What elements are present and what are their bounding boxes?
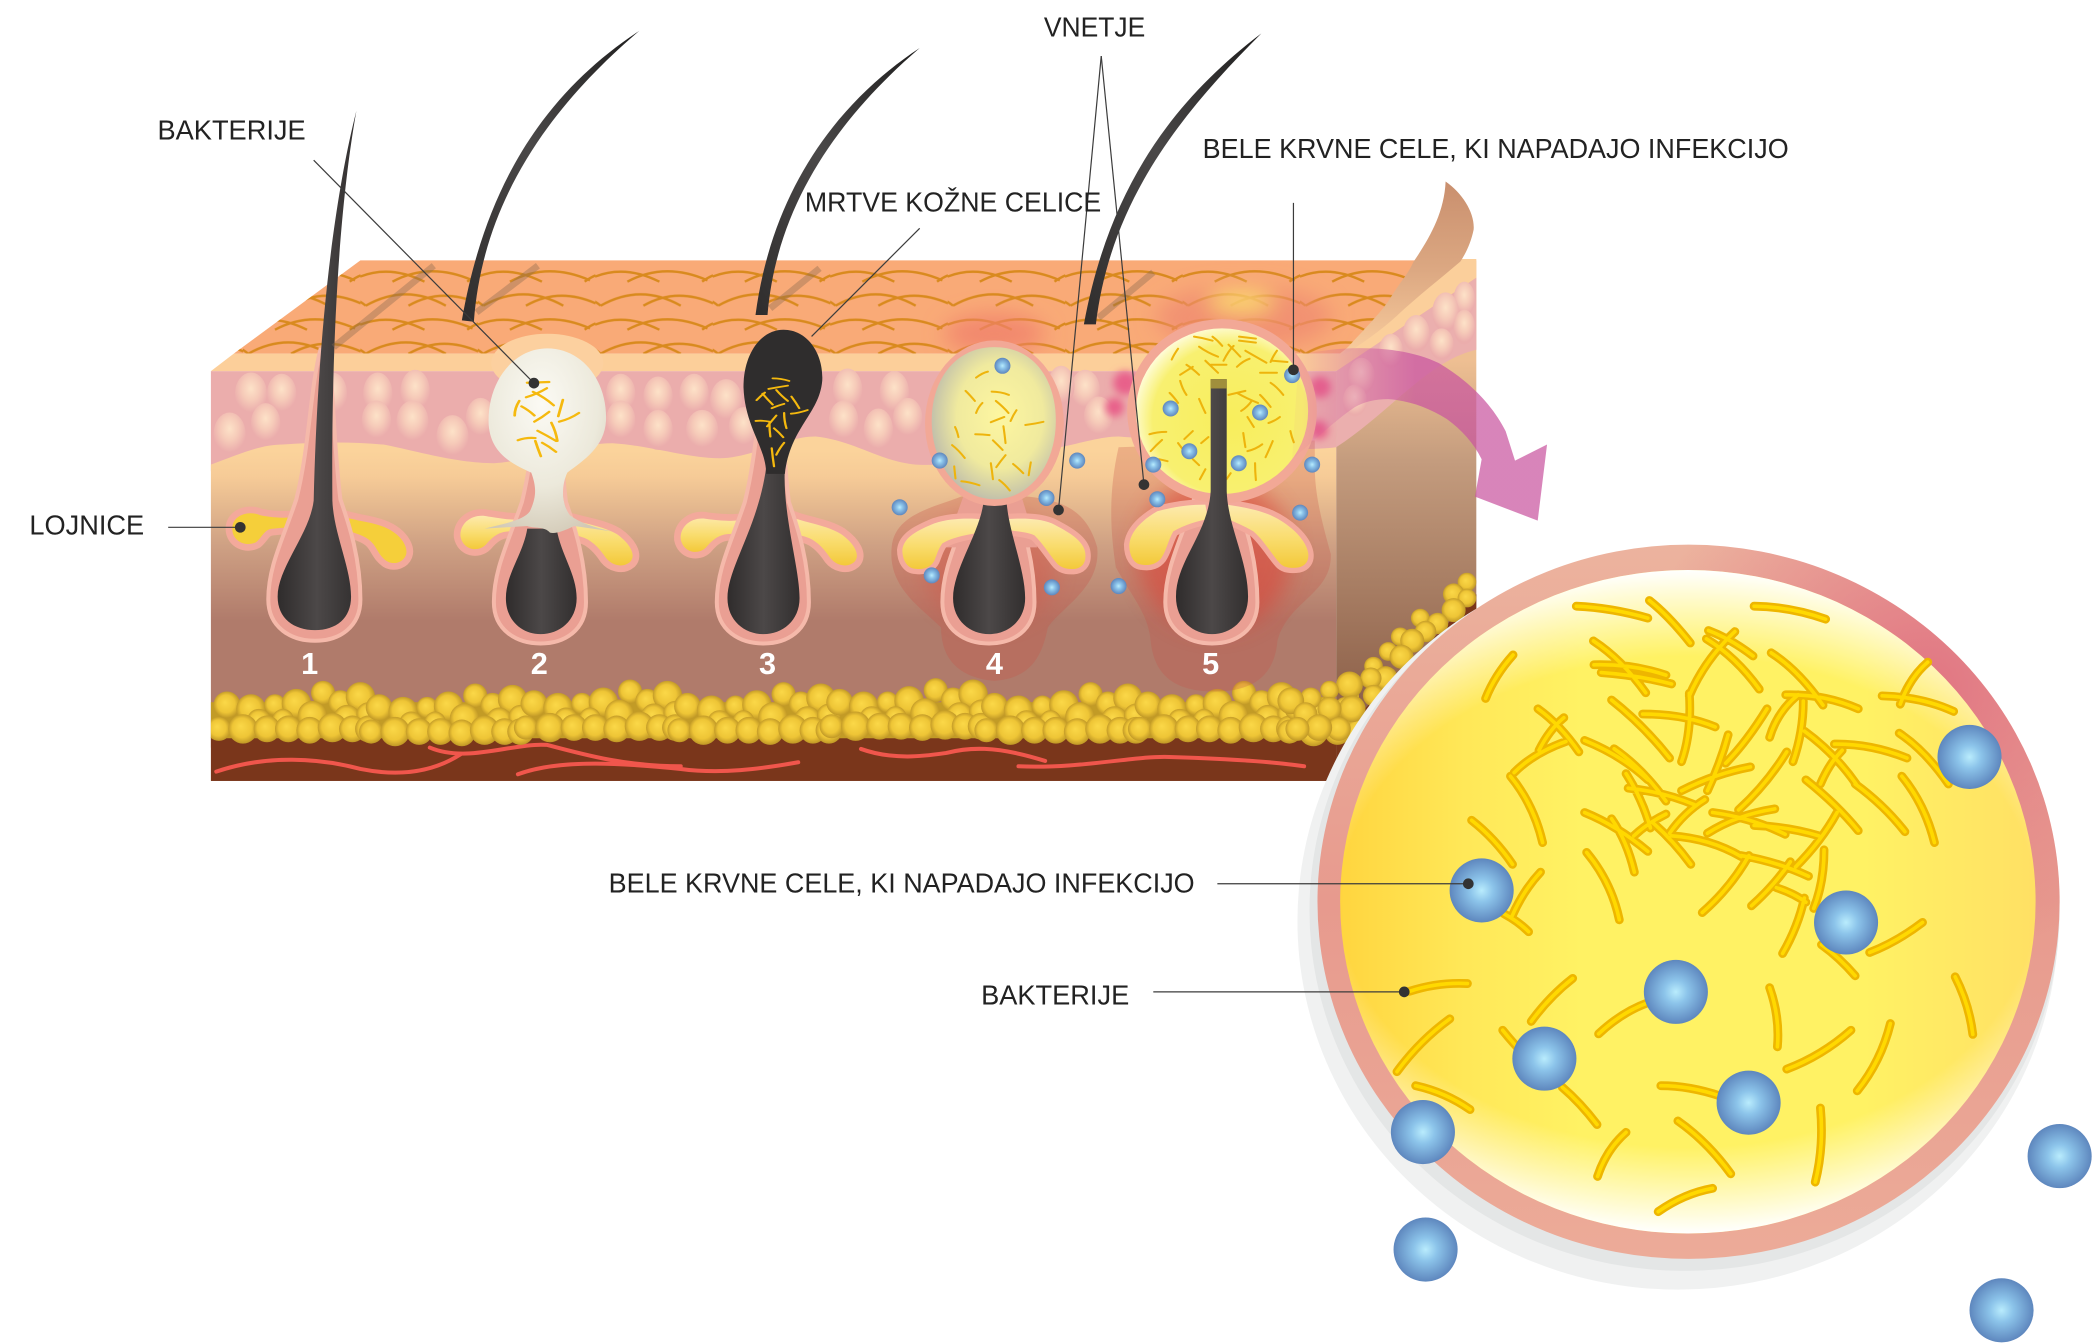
blood vessels	[216, 728, 1375, 774]
fat base shade	[211, 702, 1346, 738]
bacteria in pustule 2	[515, 382, 579, 456]
side pink layer	[1336, 278, 1476, 447]
yellow pustule	[1136, 328, 1308, 494]
hair shaft and bulb	[953, 497, 1025, 634]
step numbers: 5	[1202, 646, 1219, 681]
hair shaft and bulb	[727, 467, 800, 634]
sheath	[717, 352, 809, 643]
skin surface texture	[238, 270, 1406, 354]
magnified pustule shadow	[1297, 550, 2060, 1290]
leader lines	[168, 56, 1468, 992]
bulb	[506, 529, 577, 634]
side edge cream strip	[1336, 259, 1476, 371]
inflammation around follicle 4	[891, 497, 1098, 681]
bacteria in comedone	[756, 378, 808, 466]
peeled skin flap	[1337, 182, 1474, 359]
white core highlight	[1340, 570, 2036, 1234]
halo of pustule	[1127, 319, 1317, 503]
bacteria in pustule 5	[1149, 337, 1294, 480]
red core	[1137, 477, 1292, 631]
magnified pustule	[1317, 545, 2092, 1342]
sheath	[1165, 352, 1257, 643]
step numbers: 2	[531, 646, 548, 681]
hair shaft and bulb	[1176, 379, 1248, 634]
skin surface top face	[234, 260, 1448, 354]
label: bele krvne cele top: BELE KRVNE CELE, KI NAPADAJO INFEKCIJO	[1203, 133, 1789, 164]
sheath	[268, 350, 360, 641]
label: bakterije lower: BAKTERIJE	[981, 980, 1129, 1011]
sebaceous glands	[681, 513, 857, 565]
hair 2	[462, 31, 639, 322]
follicle 2	[460, 334, 633, 643]
dark tissue layer	[211, 737, 1336, 781]
follicle 5	[1127, 319, 1317, 643]
rosy ring tint	[1317, 545, 2060, 1259]
shaft tip	[1211, 379, 1227, 388]
side face of block	[1336, 260, 1476, 781]
label: mrtve kozne celice: MRTVE KOŽNE CELICE	[805, 187, 1101, 218]
sheath	[942, 352, 1034, 643]
sebaceous glands	[1129, 505, 1308, 568]
halo of pustule	[925, 340, 1064, 506]
inflammation around follicle 5	[1105, 371, 1331, 692]
skin cells	[214, 282, 1475, 458]
step numbers: 3	[759, 646, 776, 681]
side fat layer	[1277, 573, 1476, 741]
follicle 3	[681, 48, 920, 643]
white pustule	[485, 348, 611, 533]
front edge cream strip	[211, 354, 1341, 371]
follicle 1	[232, 111, 406, 641]
inflammation glow on surface	[944, 286, 1332, 354]
sheath	[494, 352, 586, 643]
follicle 4	[902, 340, 1085, 643]
skin block cross-section	[207, 259, 1476, 781]
sebaceous glands	[902, 519, 1085, 569]
white blood cells	[1391, 725, 2092, 1342]
hair and bulb	[278, 111, 356, 630]
dark comedone	[743, 330, 822, 474]
subcutaneous fat layer	[207, 678, 1452, 746]
step numbers: 1	[301, 646, 318, 681]
pink swelling spots	[1105, 371, 1331, 439]
upper sheath	[945, 495, 1037, 547]
surface bump	[491, 334, 603, 392]
label: vnetje: VNETJE	[1044, 12, 1145, 43]
yellow pus core	[1340, 570, 2036, 1234]
hair 4	[1084, 33, 1261, 324]
label: bakterije: BAKTERIJE	[158, 115, 306, 146]
small white blood cells	[892, 358, 1320, 595]
sebaceous glands	[460, 513, 633, 565]
label: lojnice: LOJNICE	[29, 510, 144, 541]
swollen zone	[1111, 441, 1331, 692]
label: bele krvne cele lower: BELE KRVNE CELE, KI NAPADAJO INFEKCIJO	[609, 867, 1195, 898]
bacteria in pustule 4	[952, 372, 1043, 490]
step numbers	[301, 646, 1219, 681]
hair shadows	[334, 266, 1153, 347]
bacteria	[1397, 600, 1973, 1212]
front dermis layer	[211, 437, 1336, 748]
hair 3	[756, 48, 920, 315]
arrow to magnified view	[1292, 348, 1547, 521]
outer pink ring	[1317, 545, 2060, 1259]
front pink layer	[211, 371, 1336, 471]
red core	[924, 509, 1057, 626]
step numbers: 4	[986, 646, 1003, 681]
swollen zone	[891, 497, 1098, 681]
sebaceous glands	[232, 510, 406, 563]
side dark tissue layer	[1336, 594, 1476, 781]
yellow pustule	[932, 347, 1056, 499]
leader dots	[235, 364, 1474, 997]
